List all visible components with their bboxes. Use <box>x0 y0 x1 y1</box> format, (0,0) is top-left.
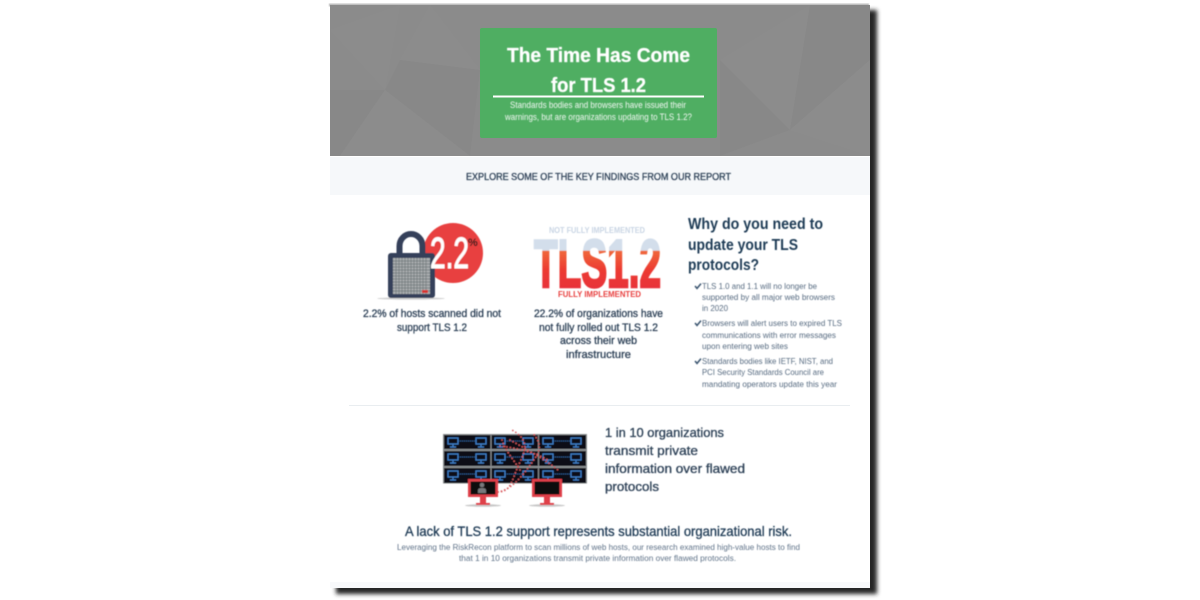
caption: organizations: infrastructure <box>566 349 631 361</box>
section band <box>330 157 870 195</box>
caption: organizations: across their web <box>560 335 637 347</box>
stat: 1 in 10 organizations: protocols <box>605 479 660 494</box>
caption: hosts scanned: 2.2% of hosts scanned did not <box>363 308 501 320</box>
title box <box>480 28 717 138</box>
heading: why update <box>688 216 823 274</box>
heading: why update: protocols? <box>688 257 759 274</box>
caption: organizations <box>534 308 663 361</box>
infographic card <box>330 5 870 588</box>
caption: hosts scanned <box>363 308 501 334</box>
conclusion text: Leveraging the RiskRecon platform to scan millions of web hosts, our research examined high-value hosts to find <box>397 542 800 552</box>
caption: organizations: 22.2% of organizations have <box>534 308 663 320</box>
caption: organizations: not fully rolled out TLS 1.2 <box>539 322 658 334</box>
icon: TLS 1.2 wordmark: TLS1.2 <box>534 226 661 302</box>
subtitle: Standards bodies and browsers have issued their <box>510 100 686 110</box>
header banner <box>330 5 870 156</box>
bullet: standards bodies: PCI Security Standards Council are <box>702 367 824 377</box>
subtitle <box>504 100 692 122</box>
bullet: browser support: supported by all major web browsers <box>702 292 835 302</box>
heading: why update: Why do you need to <box>688 216 823 233</box>
icon: server grid with flawed connection <box>443 430 587 507</box>
icon: TLS 1.2 wordmark: NOT FULLY IMPLEMENTED <box>549 226 645 235</box>
bullet: standards bodies: Standards bodies like IETF, NIST, and <box>702 356 833 366</box>
caption: hosts scanned: support TLS 1.2 <box>397 322 467 334</box>
icon: TLS 1.2 wordmark <box>534 226 661 302</box>
card drop shadow <box>336 10 877 594</box>
conclusion heading: A lack of TLS 1.2 support represents substantial organizational risk. <box>405 523 792 539</box>
stat: 1 in 10 organizations: 1 in 10 organizations <box>605 425 724 440</box>
icon: TLS 1.2 wordmark: FULLY IMPLEMENTED <box>558 290 641 299</box>
conclusion text: that 1 in 10 organizations transmit private information over flawed protocols. <box>459 553 736 563</box>
section band: EXPLORE SOME OF THE KEY FINDINGS FROM OUR REPORT <box>466 172 731 183</box>
subtitle: warnings, but are organizations updating to TLS 1.2? <box>504 112 692 122</box>
stat: 1 in 10 organizations <box>605 425 745 494</box>
bullet: standards bodies <box>695 356 837 389</box>
title: for TLS 1.2 <box>551 74 646 97</box>
heading: why update: update your TLS <box>688 237 798 254</box>
bullet: browser support: TLS 1.0 and 1.1 will no longer be <box>702 281 817 291</box>
conclusion text <box>397 542 800 563</box>
bullet: browser alerts: communications with error messages <box>702 330 836 340</box>
bullet: browser alerts: upon entering web sites <box>702 341 788 351</box>
bullet: browser alerts: Browsers will alert users to expired TLS <box>702 318 842 328</box>
stat: 1 in 10 organizations: transmit private <box>605 443 698 458</box>
bullet: standards bodies: mandating operators update this year <box>702 379 837 389</box>
icon: padlock with 2.2% badge <box>377 223 483 300</box>
title: The Time Has Come <box>507 44 690 67</box>
bullet: browser support: in 2020 <box>702 303 728 313</box>
bullet: browser support <box>695 281 835 313</box>
icon: padlock with 2.2% badge: 2.2 <box>430 229 469 278</box>
checklist <box>695 281 842 389</box>
stat: 1 in 10 organizations: information over flawed <box>605 461 745 476</box>
icon: padlock with 2.2% badge: % <box>468 237 478 249</box>
bullet: browser alerts <box>695 318 842 351</box>
title <box>507 44 690 97</box>
